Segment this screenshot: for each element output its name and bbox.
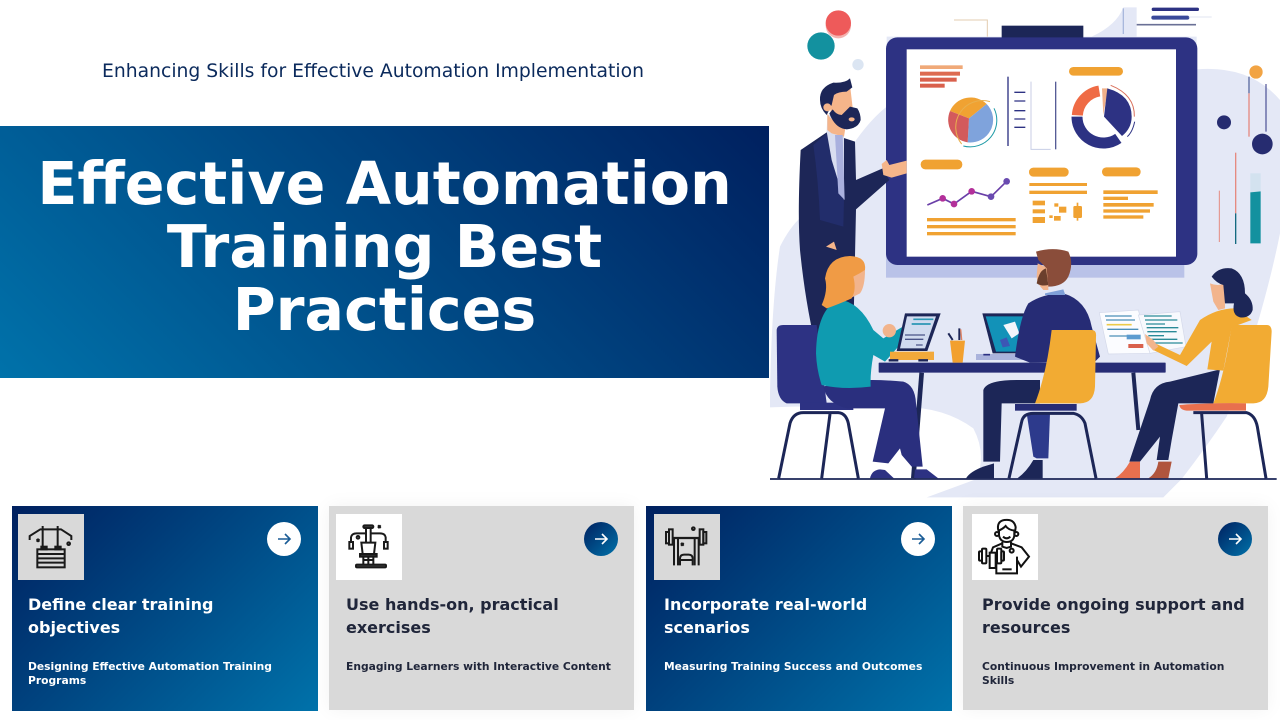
title: Training Best: [167, 213, 602, 281]
board text bars top left: [920, 65, 963, 88]
blue chair: [777, 325, 858, 478]
card description: Continuous Improvement in Automation Skills: [982, 660, 1224, 687]
card heading: Incorporate real-world scenarios: [664, 595, 867, 637]
presenter head: [820, 78, 861, 129]
arrow button: [584, 522, 618, 556]
pencil cup: [948, 328, 965, 363]
floor line: [770, 476, 1277, 482]
card heading: Use hands-on, practical exercises: [346, 595, 559, 637]
orange text lines bottom left: [927, 218, 1016, 235]
card heading: Provide ongoing support and resources: [982, 595, 1245, 637]
title: Effective Automation: [37, 150, 732, 218]
presentation board: [886, 26, 1197, 278]
presenter man: [799, 78, 907, 343]
donut chart: [1077, 85, 1135, 143]
title: [37, 150, 732, 344]
line chart: [927, 178, 1010, 207]
decorative elements right: [1217, 65, 1273, 244]
icon: trainer with dumbbell: [972, 514, 1038, 580]
text block right: [1102, 167, 1158, 219]
card 4: ongoing support: [963, 506, 1268, 710]
decorative lines top: [954, 8, 1212, 37]
decorative circles: [807, 10, 864, 70]
pie chart: [948, 97, 997, 147]
woman with laptop: [816, 256, 938, 478]
laptop right: [976, 313, 1033, 360]
yellow chair right: [1179, 325, 1272, 478]
illustration: team meeting at presentation board: [770, 8, 1280, 498]
card 2: hands-on exercises: [329, 506, 634, 710]
woman with document: [1115, 268, 1253, 478]
card 1: define objectives: [12, 506, 318, 711]
title banner: [0, 126, 769, 378]
icon: bench press: [654, 514, 720, 580]
card description: Designing Effective Automation Training Programs: [28, 660, 272, 687]
mini chart block centre: [1029, 168, 1087, 223]
arrow button: [266, 522, 300, 556]
card 3: real-world scenarios: [646, 506, 952, 711]
arrow button: [1218, 522, 1252, 556]
yellow chair centre: [1009, 330, 1096, 478]
title: Practices: [233, 276, 536, 344]
icon: gym machine: [336, 514, 402, 580]
subtitle: Enhancing Skills for Effective Automation Implementation: [102, 61, 644, 82]
card description: Measuring Training Success and Outcomes: [664, 660, 922, 673]
board legend lines: [1008, 77, 1056, 149]
orange label middle left: [921, 160, 962, 169]
orange label top right: [1069, 67, 1123, 76]
card description: Engaging Learners with Interactive Content: [346, 660, 611, 673]
laptop left: [889, 313, 941, 360]
card heading: Define clear training objectives: [28, 595, 213, 637]
table: [879, 363, 1166, 478]
background blob: [770, 7, 1280, 497]
arrow button: [900, 522, 934, 556]
icon: pull-up bar with weight stack: [18, 514, 84, 580]
open document: [1099, 310, 1186, 354]
seated man: [966, 249, 1100, 478]
